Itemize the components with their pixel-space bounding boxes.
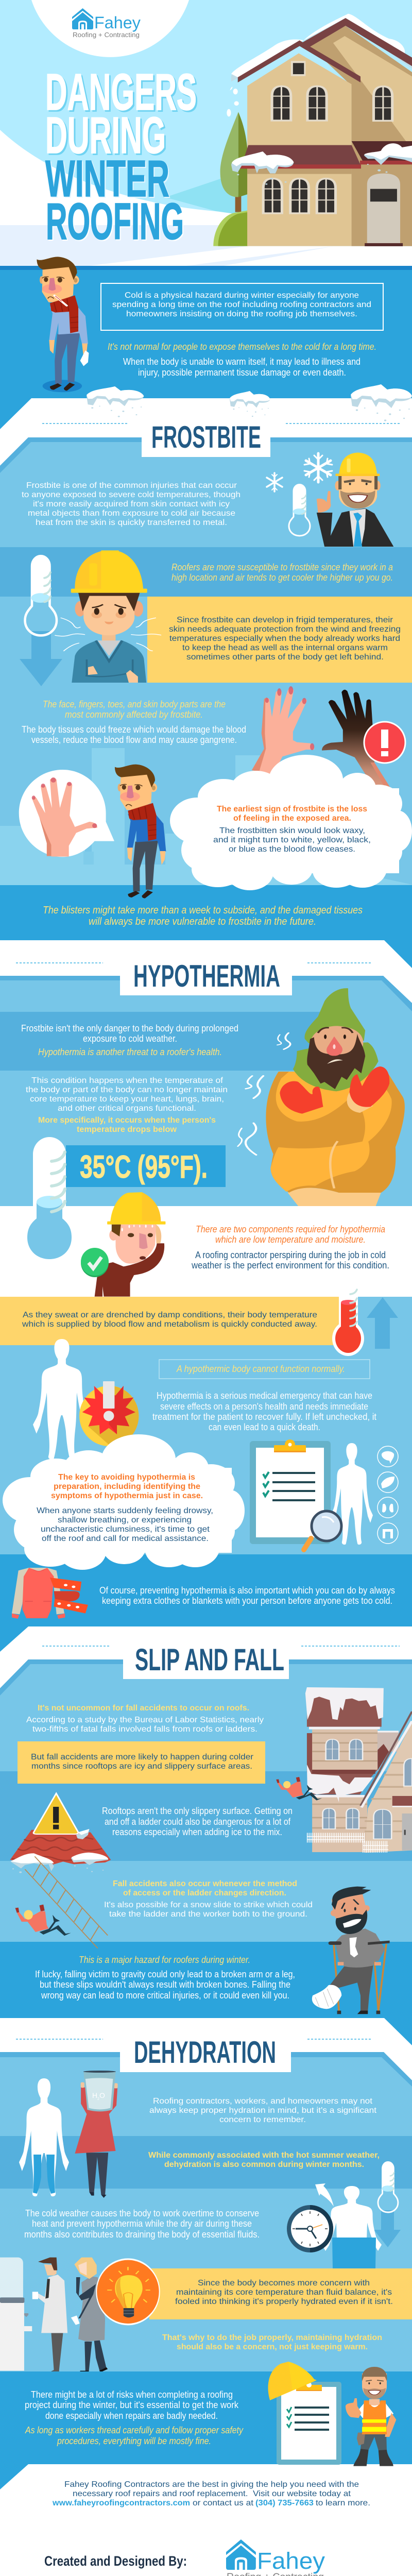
ladder direction text: take the ladder and the worker both to the ground. [109, 1910, 307, 1919]
frostbite intro text: heat from the skin is quickly transferred to metal. [36, 518, 227, 527]
panel: yellow fooled text [149, 2268, 412, 2319]
cloud text: key to avoiding hypothermia: The key to avoiding hypothermia is [58, 1473, 195, 1482]
icon: check badge [81, 1248, 109, 1277]
illustration: construction worker thumbs up [346, 2367, 396, 2466]
slippery surfaces text: and off a ladder could also be dangerous for a lot of [105, 1816, 291, 1827]
falling drops [227, 87, 239, 116]
panel: yellow frostbite explanation: temperatures especially when the body already works hard [169, 634, 400, 643]
panel: dehydration background [0, 2018, 412, 2371]
fall accident text: According to a study by the Bureau of Labor Statistics, nearly [26, 1716, 264, 1724]
icon: clock [287, 2205, 333, 2252]
cloud text: earliest sign of frostbite: and it might turn to white, yellow, black, [213, 836, 371, 844]
intro box: homeowners insisting on doing the roofing job themselves. [126, 310, 357, 318]
cloud text: key to avoiding hypothermia: off the roof and call for medical assistance. [42, 1534, 209, 1543]
closing text: procedures, everything will be mostly fine. [57, 2435, 211, 2446]
medical emergency text: treatment for the patient to recover fully. If left unchecked, it [152, 1411, 376, 1422]
thermometer and temperature callout: 35°C (95°F). [80, 1149, 208, 1185]
icon: snowflakes [267, 453, 332, 492]
frostbite affected text: The face, fingers, toes, and skin body parts are the [43, 699, 226, 709]
callout band: roofers susceptible [0, 547, 412, 885]
cloud text: earliest sign of frostbite: The frostbitten skin would look waxy, [219, 826, 365, 835]
panel: frostbite header shape [0, 398, 412, 547]
illustration: office workers at water cooler [0, 2258, 108, 2372]
label: H2O on glass: H [92, 2091, 97, 2099]
hypothermia definition text [26, 1076, 228, 1134]
intro box: spending a long time on the roof including roofing contractors and [112, 300, 371, 309]
hydration highlight text: That's why to do the job properly, maintaining hydration [162, 2333, 382, 2342]
callout: yellow colder months: But fall accidents are more likely to happen during colder [31, 1753, 254, 1761]
body silhouette with low water [19, 2078, 69, 2196]
panel: yellow frostbite explanation [147, 597, 412, 683]
logo: Fahey Roofing + Contracting [72, 8, 141, 39]
illustration: businessman in hard hat [317, 452, 393, 547]
hypothermia intro text: Hypothermia is another threat to a roofer's health. [38, 1046, 222, 1057]
magnifier [304, 1511, 341, 1550]
fall accident text: It's not uncommon for fall accidents to occur on roofs. [38, 1704, 249, 1713]
prevention text [99, 1585, 395, 1606]
ladder direction text [104, 1879, 313, 1919]
heading: frostbite: FROSTBITE [151, 420, 261, 454]
panel: yellow frostbite explanation: to keep the head as well as the internal organs warm [182, 643, 388, 652]
clipboard [250, 1439, 331, 1544]
frostbite intro text: to anyone exposed to severe cold temperatures, though [22, 490, 241, 499]
components text: which are low temperature and moisture. [215, 1234, 366, 1245]
footer call to action: (304) 735-7663 [255, 2499, 314, 2507]
door [365, 174, 403, 246]
footer call to action [52, 2480, 370, 2507]
footer call to action: Fahey Roofing Contractors are the best in giving the help you need with the [64, 2480, 359, 2489]
heading: dehydration [16, 2035, 372, 2072]
body silhouette [33, 1339, 91, 1460]
cloud text: key to avoiding hypothermia: preparation, including identifying the [54, 1482, 200, 1491]
body silhouette with organs [331, 1443, 398, 1545]
cold weather text [24, 2208, 260, 2240]
logo: footer: Fahey [257, 2548, 325, 2574]
footer call to action: to learn more. [316, 2499, 370, 2507]
illustration: snowy building [305, 1687, 412, 1853]
title: ROOFING [46, 193, 184, 250]
hypothermia definition text: and other critical organs functional. [58, 1104, 196, 1113]
logo: Fahey Roofing + Contracting: Roofing + Contracting [73, 31, 140, 39]
panel: yellow fooled text: maintaining its core temperature than fluid balance, it's [176, 2288, 392, 2297]
title: WINTER [45, 150, 169, 208]
illustration: sick man in blue sweater [115, 765, 166, 899]
callout: yellow colder months: months since rooftops are icy and slippery surface areas. [31, 1762, 252, 1771]
heading: slip and fall [42, 1642, 400, 1679]
intro section background [0, 266, 412, 455]
footer call to action: or contact us at [193, 2499, 254, 2507]
main roof snow [231, 16, 412, 81]
background skyline [0, 748, 412, 885]
hydration highlight text: should also be a concern, not just keeping warm. [177, 2343, 368, 2351]
panel: sweat yellow band: which is supplied by blood flow and metabolism is quickly conducted away. [22, 1320, 317, 1329]
icon: arrow down [20, 631, 62, 686]
credit: created and designed by: Created and Designed By: [44, 2553, 187, 2569]
footer white panel [0, 2464, 412, 2576]
dehydration intro text: Roofing contractors, workers, and homeowners may not [153, 2097, 373, 2106]
heading: dehydration: DEHYDRATION [134, 2035, 276, 2070]
major hazard text: This is a major hazard for roofers during winter. [79, 1954, 250, 1965]
intro box: Cold is a physical hazard during winter especially for anyone [125, 291, 359, 300]
fall accident text: two-fifths of fatal falls involved falls from roofs or ladders. [32, 1725, 258, 1734]
illustration: sweating worker [95, 1192, 165, 1297]
closing text: There might be a lot of risks when completing a roofing [31, 2389, 233, 2400]
hypothermia definition text: the body or part of the body can no longer maintain [26, 1086, 228, 1094]
cloud text: key to avoiding hypothermia: uncharacteristic clumsiness, it's time to get [41, 1525, 210, 1534]
frostbite affected text [22, 699, 246, 745]
panel: yellow frostbite explanation: Since frostbite can develop in frigid temperatures, their [177, 616, 393, 624]
panel: two components white band [0, 1206, 412, 1297]
label: H2O on glass: O [99, 2091, 105, 2099]
illustration: freezing man in green hat [238, 988, 405, 1206]
intro highlight text [108, 341, 376, 378]
cloud text: key to avoiding hypothermia: symptoms of hypothermia just in case. [51, 1492, 203, 1500]
frostbite intro text [22, 481, 241, 527]
illustration: falling worker from building [276, 1777, 322, 1800]
house walls [247, 26, 412, 246]
label: H2O on glass [92, 2091, 105, 2101]
icon: hot thermometer [332, 1290, 364, 1356]
illustration: red roof with warning sign and ladder [10, 1793, 111, 1948]
frostbite intro text: Frostbite is one of the common injuries that can occur [26, 481, 237, 490]
frostbite intro text: metal objects than from exposure to cold air because [28, 509, 235, 518]
blisters text: The blisters might take more than a week to subside, and the damaged tissues [43, 905, 363, 916]
slippery surfaces text: Rooftops aren't the only slippery surface. Getting on [102, 1805, 293, 1816]
panel: yellow fooled text: Since the body becomes more concern with [198, 2279, 370, 2287]
dehydration intro text: always keep proper hydration in mind, but it's a significant [149, 2106, 377, 2115]
dehydration intro text [149, 2097, 377, 2124]
hypothermia intro text: Frostbite isn't the only danger to the body during prolonged [21, 1023, 238, 1033]
ground band [0, 1554, 412, 1652]
bush [213, 210, 248, 246]
logo circle [31, 0, 189, 57]
cloud text: earliest sign of frostbite: or blue as the blood flow ceases. [229, 845, 355, 854]
fall accident text [26, 1704, 264, 1734]
body silhouette with water level [322, 2186, 382, 2268]
cloud text: key to avoiding hypothermia [37, 1473, 213, 1543]
heading: hypothermia [16, 959, 372, 995]
panel: yellow frostbite explanation: sometimes other parts of the body get left behind. [186, 653, 384, 662]
logo: footer [226, 2539, 325, 2576]
winter months callout: While commonly associated with the hot summer weather, [148, 2151, 380, 2160]
components text: A roofing contractor perspiring during the job in cold [195, 1249, 386, 1260]
roof trim [238, 18, 412, 82]
attic window [291, 61, 305, 76]
panel: yellow frostbite explanation: skin needs adequate protection from the wind and freezing [169, 625, 401, 634]
panel: sweat yellow band: As they sweat or are drenched by damp conditions, their body temperature [23, 1311, 317, 1319]
heading: frostbite [42, 420, 400, 457]
medical emergency text: can even lead to a quick death. [209, 1421, 320, 1432]
intro highlight text: When the body is unable to warm itself, it may lead to illness and [123, 356, 360, 367]
callout: hypothermic body box: A hypothermic body cannot function normally. [176, 1363, 345, 1374]
icon: warm jacket and scarf [12, 1568, 88, 1619]
illustration: falling worker from ladder [15, 1905, 71, 1936]
footer call to action: necessary roof repairs and roof replacement. Visit our website today at [73, 2489, 351, 2498]
frostbite affected text: most commonly affected by frostbite. [65, 709, 203, 720]
medical emergency text: Hypothermia is a serious medical emergency that can have [157, 1390, 372, 1401]
closing text: project during the winter, but it's essential to get the work [25, 2399, 239, 2410]
ground band [0, 2371, 412, 2489]
cloud text: earliest sign of frostbite: of feeling in the exposed area. [233, 814, 351, 823]
major hazard text: If lucky, falling victim to gravity could only lead to a broken arm or a leg, [35, 1969, 295, 1979]
closing text [25, 2389, 244, 2446]
cold weather text: heat and prevent hypothermia while the dry air during these [32, 2218, 252, 2229]
icon: thermometer and down arrow [374, 2162, 401, 2247]
panel: yellow fooled text: fooled into thinking it's properly hydrated even if it isn't. [175, 2297, 393, 2306]
cloud text: key to avoiding hypothermia: shallow breathing, or experiencing [58, 1516, 192, 1524]
dehydration intro text: concern to remember. [219, 2115, 306, 2124]
ladder direction text: It's also possible for a snow slide to strike which could [104, 1901, 313, 1909]
winter months callout: dehydration is also common during winter months. [164, 2160, 364, 2169]
cloud text: key to avoiding hypothermia: When anyone starts suddenly feeling drowsy, [37, 1506, 213, 1515]
hypothermia definition text: temperature drops below [77, 1125, 177, 1134]
cloud text: earliest sign of frostbite [213, 805, 371, 854]
hypothermia definition text: core temperature to keep your heart, lungs, brain, [30, 1095, 224, 1104]
illustration: shivering worker [55, 550, 161, 683]
ground band [0, 885, 412, 941]
snow patches [87, 384, 412, 421]
title: DURING [47, 108, 167, 166]
intro box [101, 283, 383, 330]
slippery surfaces text [102, 1805, 293, 1837]
heading: hypothermia: HYPOTHERMIA [133, 959, 280, 993]
title: DANGERS [47, 65, 198, 123]
cold weather text: months also contributes to draining the body of essential fluids. [24, 2229, 260, 2240]
speech bubble with hand [19, 770, 114, 857]
components text [191, 1224, 389, 1270]
icon: curved arrow [315, 2183, 334, 2207]
title: DANGERS [45, 63, 197, 121]
heading: slip and fall: SLIP AND FALL [135, 1642, 284, 1677]
ladder direction text: Fall accidents also occur whenever the method [113, 1879, 297, 1888]
major hazard text: but these slips wouldn't always result with broken bones. Falling the [40, 1979, 290, 1990]
illustration: sick man with thermometer and scarf [37, 257, 89, 392]
title [45, 63, 198, 251]
panel: slip and fall background [0, 1626, 412, 2019]
illustration: woman lifting water glass [75, 2071, 118, 2198]
panel: sweat yellow band [0, 1297, 412, 1554]
title: ROOFING [47, 194, 185, 251]
blisters text: will always be more vulnerable to frostbite in the future. [89, 916, 316, 927]
label: H2O on glass: 2 [97, 2097, 99, 2101]
icon: thermometer large [25, 556, 57, 635]
icon: thermometer [289, 484, 310, 536]
snow on awnings [231, 143, 412, 174]
hypothermia definition text: More specifically, it occurs when the person's [38, 1116, 216, 1125]
hypothermia intro text [21, 1023, 238, 1057]
icon: alert badge [79, 1381, 139, 1446]
callout: hypothermic body box [159, 1360, 370, 1379]
frostbite intro text: it's more easily acquired from skin contact with icy [33, 500, 230, 509]
icon: arrow up [367, 1297, 398, 1349]
cloud text: earliest sign of frostbite: The earliest sign of frostbite is the loss [217, 805, 367, 814]
cold weather text: The cold weather causes the body to work overtime to conserve [25, 2208, 259, 2218]
hypothermia intro text: exposure to cold weather. [83, 1033, 177, 1044]
components text: There are two components required for hypothermia [196, 1224, 385, 1234]
icon: light bulb in orange circle [96, 2258, 160, 2325]
icon: alert circle [364, 722, 405, 763]
medical emergency text: severe effects on a person's health and needs immediate [160, 1401, 368, 1412]
major hazard text: wrong way can lead to more critical injuries, or it could even kill you. [41, 1990, 289, 2001]
upper windows [272, 86, 392, 121]
illustration: frostbitten hand compare [252, 686, 393, 792]
frostbite affected text: vessels, reduce the blood flow and may cause gangrene. [31, 734, 237, 745]
cloud: earliest sign [170, 755, 412, 890]
clipboard with hard hat [268, 2362, 341, 2465]
lower windows [263, 179, 336, 213]
slippery surfaces text: reasons especially when adding ice to the mix. [112, 1826, 282, 1837]
panel: hypothermia background [0, 940, 412, 1206]
logo: Fahey Roofing + Contracting: Fahey [94, 13, 141, 32]
header background [0, 0, 412, 266]
illustration: snowy house [213, 14, 412, 246]
hypothermia definition text: This condition happens when the temperature of [31, 1076, 224, 1085]
ladder direction text: of access or the ladder changes direction. [123, 1889, 286, 1897]
callout: yellow colder months [18, 1741, 265, 1784]
title: WINTER [46, 151, 170, 209]
awning [238, 141, 412, 168]
footer call to action: www.faheyroofingcontractors.com [52, 2499, 190, 2507]
medical emergency text [152, 1390, 376, 1432]
illustration: injured man on crutches [312, 1887, 390, 2014]
icon: tall thermometer [27, 1137, 72, 1259]
thermometer and temperature callout [66, 1145, 226, 1187]
intro highlight text: It's not normal for people to expose themselves to the cold for a long time. [108, 341, 376, 352]
closing text: done especially when repairs are badly needed. [45, 2410, 218, 2421]
closing text: As long as workers thread carefully and follow proper safety [25, 2425, 244, 2435]
tree [220, 112, 248, 212]
blisters text [43, 905, 363, 927]
title: DURING [45, 107, 166, 164]
intro highlight text: injury, possible permanent tissue damage or even death. [138, 367, 346, 378]
winter months callout [148, 2151, 380, 2169]
hydration highlight text [162, 2333, 382, 2351]
cloud: key to avoiding [3, 1434, 245, 1570]
components text: weather is the perfect environment for this condition. [191, 1260, 389, 1270]
major hazard text [35, 1954, 295, 2001]
frostbite affected text: The body tissues could freeze which would damage the blood [22, 724, 246, 735]
